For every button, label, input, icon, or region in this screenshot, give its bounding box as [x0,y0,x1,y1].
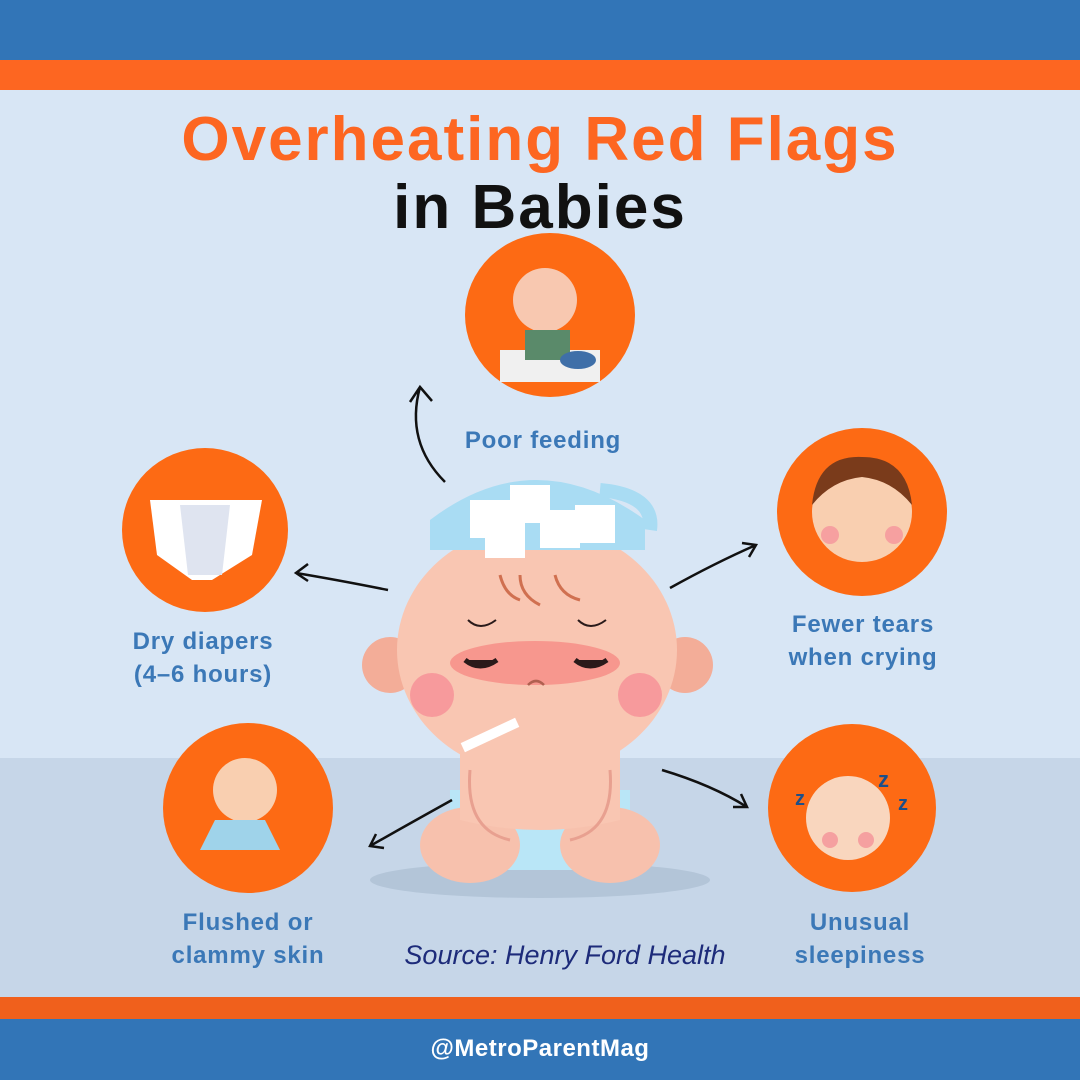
bottom band: @MetroParentMag [431,1035,649,1062]
text: Flushed or [183,909,313,936]
source: Source: Henry Ford Health [404,940,726,970]
text: Fewer tears [792,611,934,638]
title: in Babies [393,173,687,242]
text: sleepiness [795,942,925,969]
text: (4–6 hours) [134,661,272,688]
labels: Poor feeding [465,427,621,454]
illustration: z [898,793,908,815]
baby [370,862,710,898]
illustration: z [878,767,889,792]
text: when crying [789,644,937,671]
arrows [296,387,756,848]
bottom band [0,997,1080,1080]
text: Dry diapers [133,628,273,655]
circles [122,233,947,893]
illustration: z [795,788,805,810]
title [181,105,899,242]
title: Overheating Red Flags [181,105,899,174]
text: Unusual [810,909,910,936]
text: clammy skin [172,942,324,969]
top band [0,0,1080,60]
icons inside [500,268,600,382]
floor [0,758,1080,998]
